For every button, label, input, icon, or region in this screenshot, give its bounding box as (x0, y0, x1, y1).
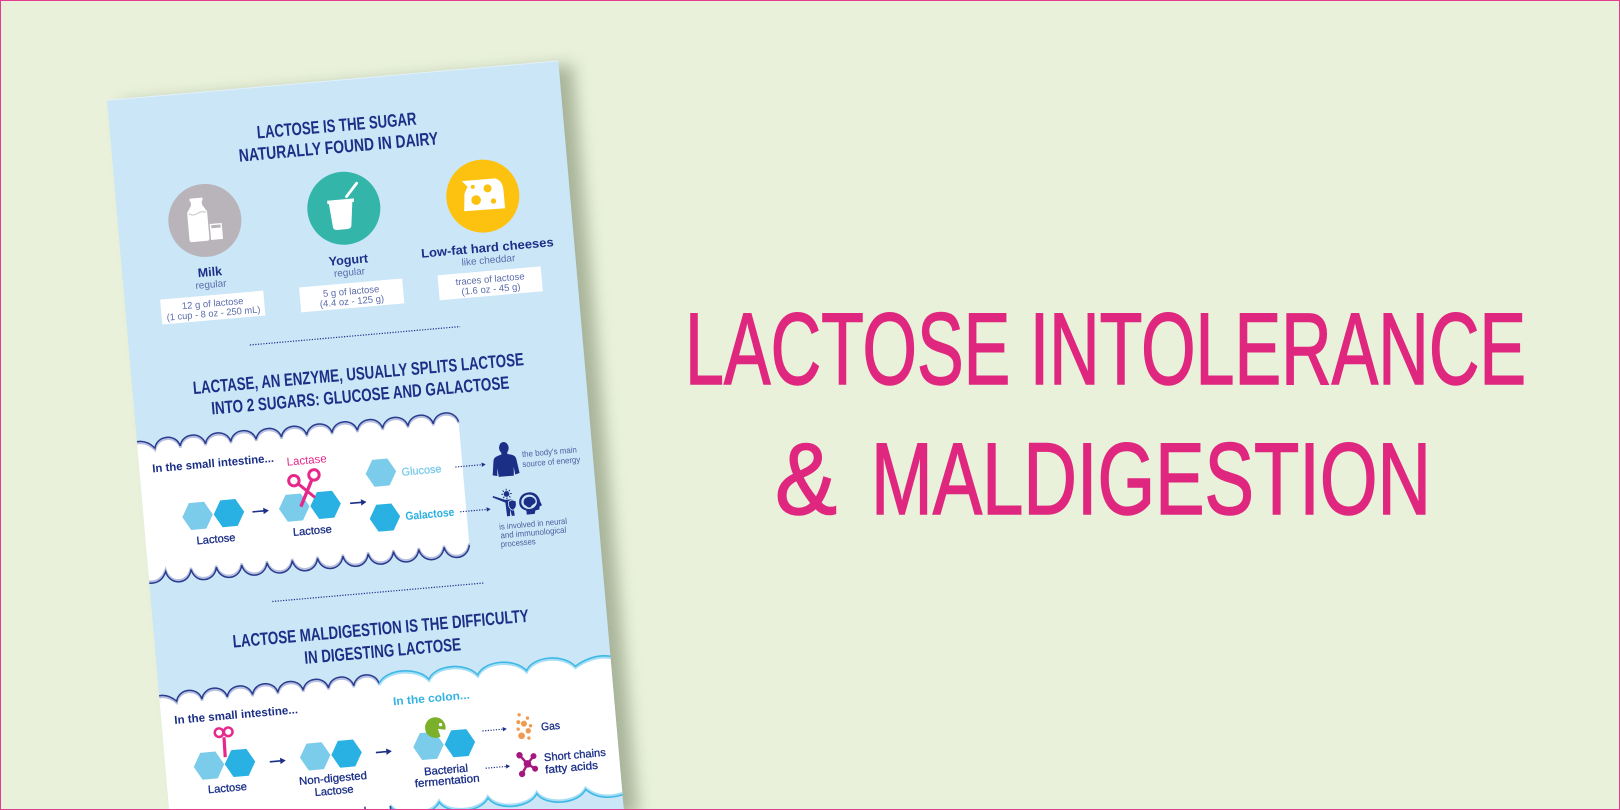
cheese label: (1.6 oz - 45 g) (461, 282, 521, 298)
title: & (775, 422, 837, 536)
panel: maldigestion, small intestine and colon (159, 653, 623, 810)
small intestine label: In the small intestine... (174, 704, 298, 727)
infographic page, tilted (107, 59, 638, 810)
arrow (376, 748, 392, 756)
heading: lactose is the sugar (236, 107, 439, 166)
icon: molecule (516, 751, 539, 777)
icon: head with brain (518, 491, 543, 515)
galactose hexagon (369, 503, 401, 532)
icon: open scissors (288, 469, 322, 508)
colon label: In the colon... (393, 690, 470, 708)
yogurt label: 5 g of lactose (323, 284, 380, 300)
heading: lactose is the sugar: NATURALLY FOUND IN DAIRY (238, 128, 439, 166)
dotted arrow to neural icons (460, 507, 491, 514)
arrow (270, 757, 286, 765)
neural text: and immunological (500, 525, 567, 540)
galactose label: Galactose (405, 507, 455, 523)
lactose label: Lactose (208, 781, 247, 796)
neural text (499, 516, 569, 549)
yogurt label: (4.4 oz - 125 g) (319, 294, 385, 310)
heading: maldigestion (232, 606, 531, 674)
small intestine label: In the small intestine... (152, 453, 274, 475)
fermentation label: Bacterial (424, 763, 468, 778)
lactase label: Lactase (286, 453, 327, 469)
gas label: Gas (541, 720, 561, 734)
icon: cheese (443, 157, 522, 236)
lactose hexagons (181, 498, 245, 531)
dotted arrow to gas (482, 727, 507, 733)
yogurt label: regular (334, 266, 366, 280)
cheese label: like cheddar (461, 253, 516, 269)
title (685, 292, 1526, 536)
second lactose label: Lactose (292, 524, 332, 539)
title: MALDIGESTION (871, 422, 1431, 536)
heading: lactase: LACTASE, AN ENZYME, USUALLY SPLITS LACTOSE (192, 349, 525, 398)
cheese label: traces of lactose (455, 271, 525, 288)
neural text: processes (500, 536, 536, 549)
non-digested hexagons (299, 739, 363, 771)
icon: bacterium pac-man (424, 716, 446, 739)
fatty acids label: Short chains (544, 747, 607, 764)
milk label: 12 g of lactose (181, 296, 244, 312)
icon: yogurt (304, 169, 383, 248)
panel: small intestine, lactase splits lactose (137, 412, 470, 584)
neural text: is involved in neural (499, 516, 567, 532)
split hexagons (278, 490, 342, 522)
arrow (252, 507, 269, 515)
non-digested label (299, 770, 369, 800)
icon: closed scissors (214, 727, 235, 758)
icon: gas bubbles (515, 712, 533, 741)
cheese label: Low-fat hard cheeses (420, 235, 554, 261)
dotted arrow to body icon (455, 462, 486, 469)
yogurt label: Yogurt (328, 251, 369, 269)
dotted arrow to fatty acids (485, 764, 510, 770)
body energy text: the body's main (522, 444, 577, 459)
arrow (350, 499, 367, 507)
heading: lactase: INTO 2 SUGARS: GLUCOSE AND GALACTOSE (210, 373, 510, 419)
non-digested label: Non-digested (299, 770, 367, 788)
milk label (157, 261, 265, 325)
lactose hexagons (193, 748, 256, 780)
heading: lactose is the sugar: LACTOSE IS THE SUGAR (256, 109, 417, 143)
body energy text (521, 444, 581, 469)
icon: human body (490, 441, 520, 477)
non-digested label: Lactose (314, 784, 354, 799)
icon: immune figure (492, 488, 517, 517)
fermentation hexagons (412, 728, 476, 761)
fermentation label (413, 762, 480, 790)
glucose label: Glucose (401, 463, 442, 479)
heading: maldigestion: IN DIGESTING LACTOSE (304, 634, 462, 668)
heading: lactase (192, 349, 526, 420)
body energy text: source of energy (522, 454, 581, 469)
icon: milk (165, 181, 244, 260)
lactose label: Lactose (196, 532, 236, 547)
fatty acids label (544, 747, 608, 776)
yogurt label (296, 249, 404, 312)
fatty acids label: fatty acids (545, 760, 599, 776)
milk label: (1 cup - 8 oz - 250 mL) (166, 304, 261, 324)
heading: maldigestion: LACTOSE MALDIGESTION IS THE DIFFICULTY (232, 606, 529, 652)
cheese label (420, 235, 558, 302)
fermentation label: fermentation (414, 773, 480, 790)
glucose hexagon (365, 458, 397, 487)
milk label: regular (195, 278, 228, 292)
milk label: Milk (197, 264, 223, 280)
